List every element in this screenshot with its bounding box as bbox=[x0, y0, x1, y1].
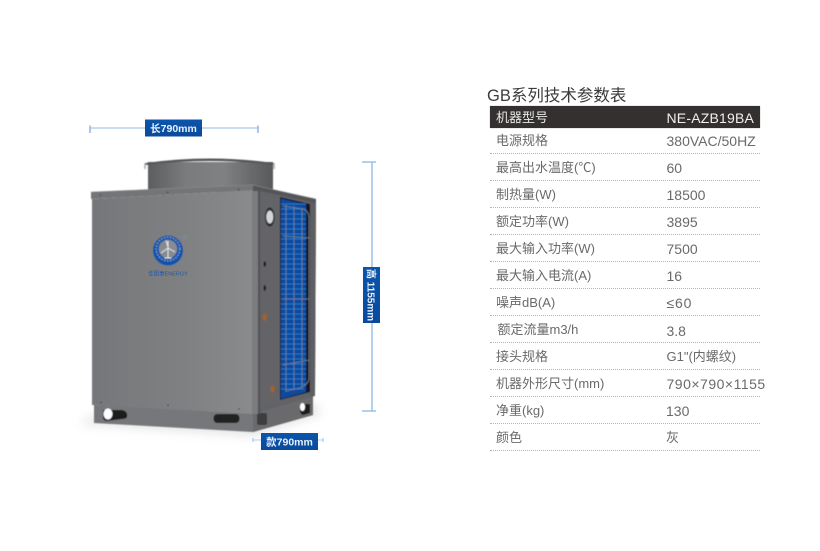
blue condenser grille bbox=[281, 198, 310, 399]
row: heating capacity: 18500 bbox=[666, 187, 705, 203]
table header row bbox=[490, 106, 760, 128]
base openings bbox=[103, 403, 310, 425]
base frame bbox=[94, 394, 313, 432]
row: connector: 接头规格 bbox=[496, 349, 548, 364]
row: dimensions bbox=[496, 376, 766, 392]
dimension: length: 长790mm bbox=[150, 122, 197, 135]
logo bbox=[153, 236, 186, 266]
heat pump unit bbox=[91, 158, 316, 432]
table header row: 机器型号 bbox=[496, 110, 548, 124]
row: dimensions: 机器外形尺寸(mm) bbox=[496, 376, 604, 391]
row: rated power: 额定功率(W) bbox=[496, 214, 569, 229]
front rivets bbox=[100, 189, 240, 410]
dimension: width bbox=[253, 433, 323, 450]
row: colour bbox=[496, 430, 679, 445]
row: rated flow bbox=[498, 322, 686, 339]
logo wordmark: 佳图泰ENERGY bbox=[148, 270, 188, 278]
row: max input power bbox=[496, 241, 698, 257]
front panel bbox=[92, 190, 253, 414]
row: colour: 颜色 bbox=[496, 430, 522, 445]
table header row: NE-AZB19BA bbox=[666, 110, 754, 126]
row: rated power: 3895 bbox=[666, 214, 698, 230]
row: max water temp: 60 bbox=[666, 160, 682, 176]
fan housing bbox=[145, 158, 274, 192]
row: net weight bbox=[496, 403, 689, 419]
corner post bbox=[252, 186, 260, 414]
dimension: height: 高 1155mm bbox=[364, 269, 378, 321]
side ports bbox=[263, 261, 274, 393]
row: connector bbox=[496, 349, 736, 364]
row: noise: 噪声dB(A) bbox=[496, 295, 555, 310]
row: power: 电源规格 bbox=[496, 133, 548, 148]
row: heating capacity bbox=[496, 187, 705, 203]
row: rated power bbox=[496, 214, 698, 230]
ground shadow bbox=[80, 402, 322, 436]
table title: GB系列技术参数表 bbox=[487, 86, 626, 104]
gauge bbox=[265, 208, 275, 226]
side frame shadow behind grille bbox=[280, 197, 310, 400]
row: dimensions: 790×790×1155 bbox=[666, 376, 766, 392]
dimension: length bbox=[90, 120, 258, 136]
row: connector: G1"(内螺纹) bbox=[666, 349, 736, 364]
row: noise: ≤60 bbox=[666, 295, 692, 311]
row: heating capacity: 制热量(W) bbox=[496, 187, 556, 202]
row: net weight: 130 bbox=[666, 403, 689, 419]
right edge post bbox=[310, 199, 316, 396]
row: rated flow: 3.8 bbox=[666, 323, 686, 339]
dimension: width: 款790mm bbox=[266, 436, 313, 448]
row: noise bbox=[496, 295, 692, 311]
row: colour: 灰 bbox=[666, 430, 679, 445]
row: max input current: 16 bbox=[666, 268, 682, 284]
row: max input power: 最大输入功率(W) bbox=[496, 241, 595, 256]
row: power bbox=[496, 133, 756, 149]
row: rated flow: 额定流量m3/h bbox=[498, 322, 578, 337]
row: net weight: 净重(kg) bbox=[496, 403, 544, 418]
row: max input current: 最大输入电流(A) bbox=[496, 268, 591, 283]
row: max input power: 7500 bbox=[666, 241, 698, 257]
dimension: height bbox=[362, 162, 380, 411]
top cap bbox=[91, 185, 253, 199]
row: power: 380VAC/50HZ bbox=[666, 133, 756, 149]
row: max input current bbox=[496, 268, 682, 284]
row: max water temp: 最高出水温度(℃) bbox=[496, 160, 596, 175]
row: max water temp bbox=[496, 160, 682, 176]
side panel bbox=[253, 186, 316, 414]
